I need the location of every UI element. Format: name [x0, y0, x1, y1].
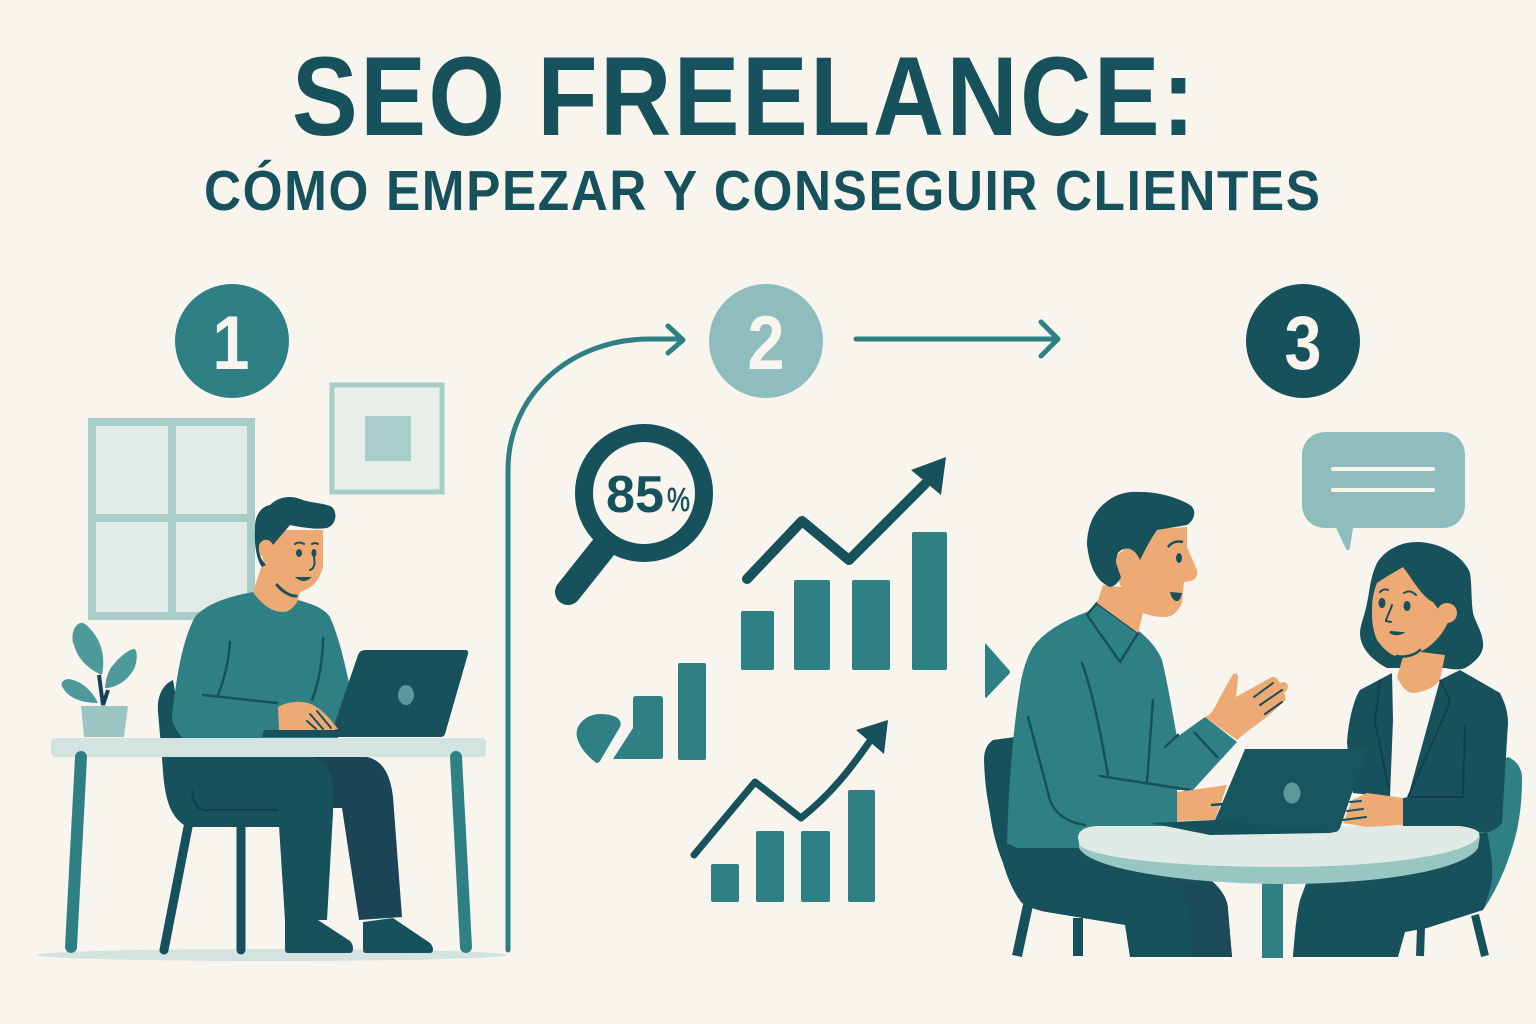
man's collar [1087, 603, 1138, 662]
man's clothing lines [1028, 663, 1217, 825]
speech bubble [1302, 432, 1465, 550]
scene 3: client meeting [984, 432, 1522, 958]
floor shadow [37, 949, 507, 961]
man's head and neck [1097, 585, 1150, 633]
woman's blouse [1390, 677, 1440, 797]
person near leg [192, 757, 333, 920]
step 3 number badge: 3 [1284, 301, 1322, 386]
woman's chair [1460, 757, 1522, 915]
bar chart: large with rising arrow [741, 457, 947, 670]
title: SEO FREELANCE: [292, 35, 1195, 159]
meeting laptop [1150, 749, 1367, 835]
icon: magnifying glass with 85% [568, 433, 704, 592]
window [88, 418, 255, 620]
man's face details [1168, 542, 1183, 601]
person torso [172, 592, 350, 738]
step 2 number badge [709, 284, 823, 398]
bar chart: lower with rising arrow [694, 720, 888, 902]
man's lower hand [1177, 785, 1227, 821]
scene 2: SEO analytics icons [568, 433, 947, 902]
step 1 number badge: 1 [212, 301, 250, 386]
woman's legs [1293, 832, 1492, 957]
man's chair [984, 737, 1140, 925]
man's legs [1017, 847, 1232, 957]
arrow: curved from step 1 to step 2 [508, 326, 683, 950]
shoes [285, 920, 353, 953]
laptop [262, 650, 468, 737]
table stem [1262, 875, 1283, 958]
step 1 number badge [175, 284, 289, 398]
icon: magnifying glass with 85%: % [667, 481, 690, 518]
woman's hand [1343, 793, 1403, 827]
man's raised hand [1205, 674, 1288, 740]
chair [158, 680, 290, 827]
arrow: step 2 to step 3 [856, 322, 1058, 356]
man's torso [1007, 603, 1237, 848]
person head and neck [253, 562, 302, 612]
woman [1347, 542, 1508, 832]
woman's neck [1397, 650, 1445, 693]
step 3 number badge [1246, 284, 1360, 398]
desk [51, 738, 486, 947]
potted plant [62, 623, 137, 737]
step 2 number badge: 2 [747, 301, 785, 386]
bar chart: small with pie slice [577, 663, 706, 763]
person far leg [313, 757, 402, 920]
person face details [277, 542, 318, 596]
woman's hair [1360, 542, 1483, 669]
woman's jacket [1347, 670, 1508, 832]
subtitle: CÓMO EMPEZAR Y CONSEGUIR CLIENTES [204, 160, 1320, 223]
table [1078, 826, 1480, 884]
scene 1: freelancer working at desk [37, 385, 507, 961]
hand on laptop [278, 702, 338, 730]
framed picture [332, 385, 442, 492]
icon: magnifying glass with 85%: 85 [606, 466, 664, 524]
arrow: small triangle to meeting scene [985, 644, 1010, 698]
woman's face [1372, 567, 1448, 656]
